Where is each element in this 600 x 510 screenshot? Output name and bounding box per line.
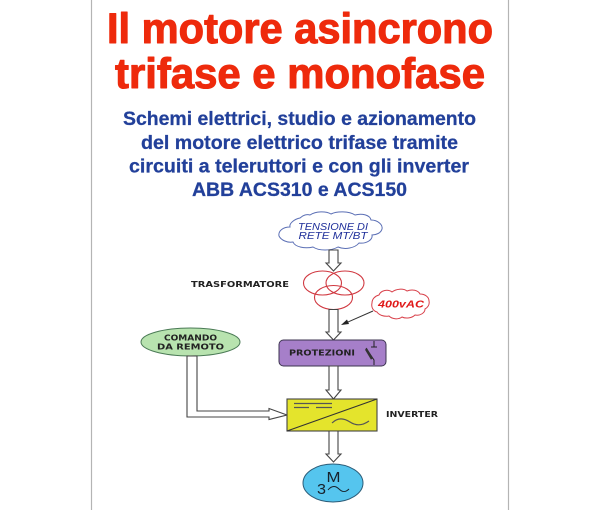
icon: transformer <box>304 271 364 310</box>
title: Il motore asincrono <box>107 5 493 53</box>
icon: motor <box>303 464 363 502</box>
icon: switch <box>366 341 377 365</box>
title: trifase e monofase <box>115 50 485 98</box>
icon: motor: 3 <box>317 482 326 498</box>
icon: AC sine <box>332 419 369 425</box>
arrow: rete to trasformatore <box>326 250 341 271</box>
arrow: trasformatore to protezioni <box>326 310 341 340</box>
arrow: protezioni to inverter <box>326 366 341 399</box>
subtitle: del motore elettrico trifase tramite <box>141 133 458 154</box>
book cover page <box>92 0 508 510</box>
arrow: inverter to motor <box>326 431 341 462</box>
title <box>107 5 493 98</box>
arrow: 400vAC pointer <box>341 311 373 325</box>
panel: protezioni: PROTEZIONI <box>289 348 355 358</box>
flow diagram <box>141 212 438 502</box>
subtitle: ABB ACS310 e ACS150 <box>192 180 407 201</box>
icon: DC symbol <box>294 404 332 408</box>
label: inverter: INVERTER <box>386 410 438 419</box>
cloud: 400vAC: 400vAC <box>377 298 424 310</box>
panel: comando da remoto <box>141 328 240 356</box>
arrow: comando to inverter <box>187 356 287 420</box>
icon: motor: M <box>326 470 340 486</box>
label: trasformatore: TRASFORMATORE <box>191 280 289 289</box>
panel: protezioni <box>279 340 386 366</box>
subtitle: Schemi elettrici, studio e azionamento <box>123 109 476 130</box>
panel: comando da remoto: COMANDO <box>164 334 217 342</box>
subtitle: circuiti a teleruttori e con gli inverter <box>129 156 470 178</box>
panel: inverter <box>287 399 377 431</box>
panel: comando da remoto: DA REMOTO <box>157 342 224 352</box>
cloud: 400vAC <box>372 289 429 319</box>
cloud: tensione di rete: TENSIONE DI <box>298 221 368 233</box>
subtitle <box>123 109 476 201</box>
cloud: tensione di rete <box>279 212 382 250</box>
cloud: tensione di rete: RETE MT/BT <box>298 230 369 242</box>
